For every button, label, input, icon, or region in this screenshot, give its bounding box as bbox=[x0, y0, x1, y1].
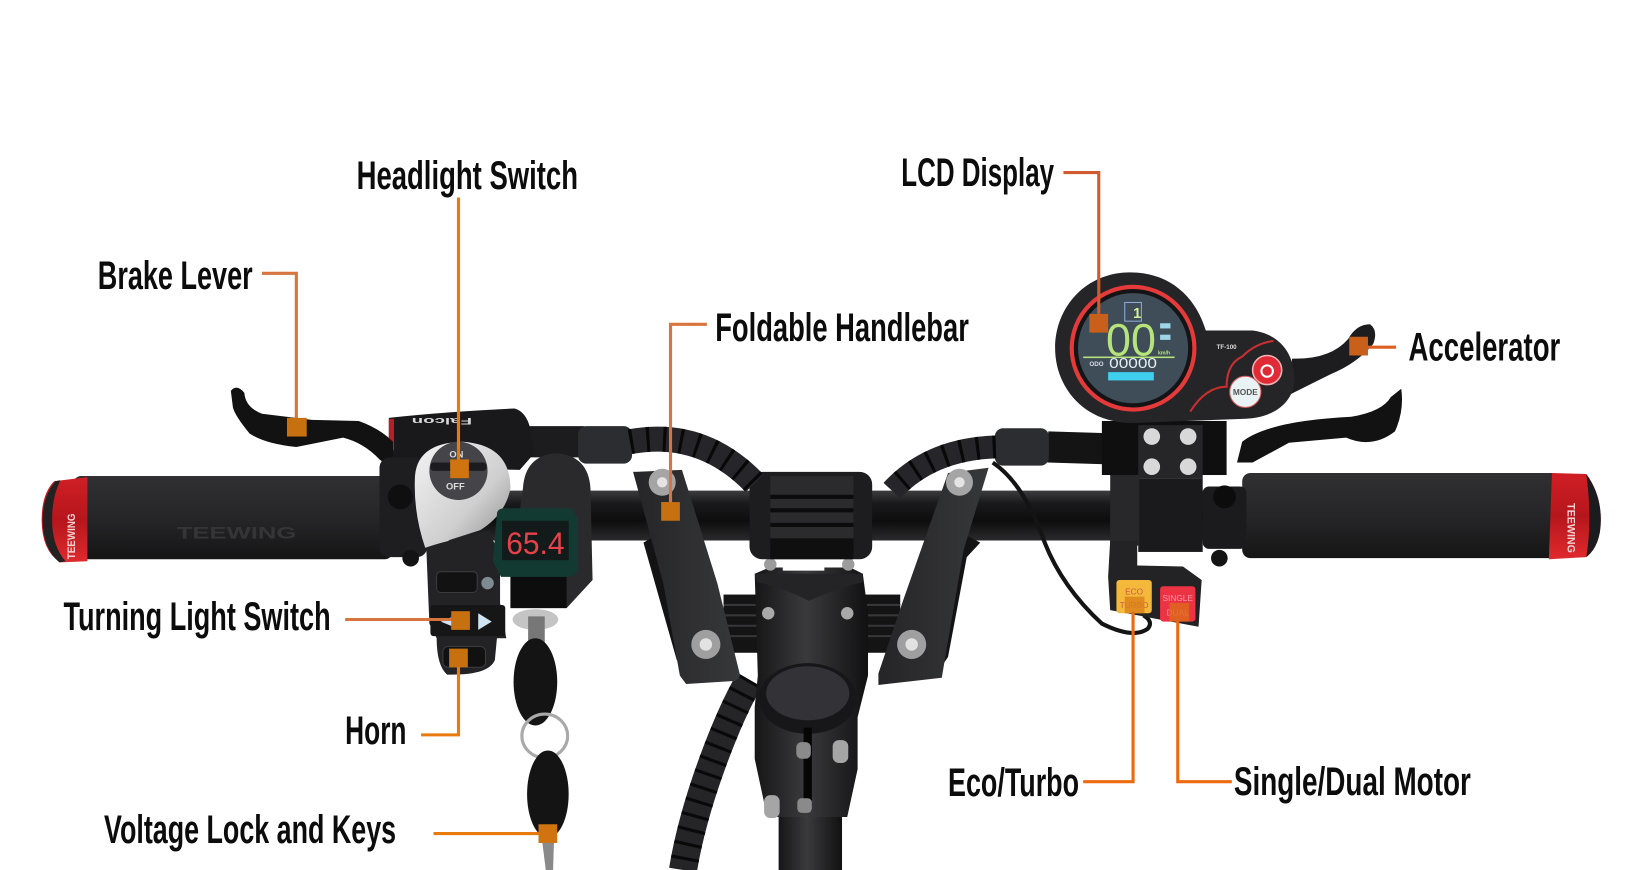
left grip bbox=[42, 476, 393, 562]
callout: Accelerator: Accelerator bbox=[1409, 326, 1560, 370]
LCD readout: 00000 bbox=[1109, 356, 1157, 372]
headlight switch: OFF bbox=[446, 482, 465, 492]
left grip: TEEWING bbox=[177, 523, 296, 542]
right folding bracket bbox=[878, 468, 989, 685]
lock and keys bbox=[513, 609, 569, 870]
LCD readout: ODO bbox=[1089, 361, 1104, 368]
headlight switch bbox=[415, 442, 510, 548]
stem and steering column bbox=[755, 558, 868, 870]
callout: LCD Display: LCD Display bbox=[901, 151, 1054, 195]
LCD display unit bbox=[1055, 272, 1294, 423]
right brake lever bbox=[1237, 389, 1402, 463]
right red bar end bbox=[1549, 473, 1601, 559]
callout: Headlight Switch bbox=[357, 154, 578, 478]
callout: Eco/Turbo: Eco/Turbo bbox=[948, 761, 1079, 805]
callout: Voltage Lock and Keys: Voltage Lock and Keys bbox=[104, 808, 396, 852]
LCD readout: km/h bbox=[1158, 350, 1170, 356]
callout: Foldable Handlebar bbox=[661, 306, 969, 521]
left brake lever bbox=[231, 388, 393, 470]
callout: Foldable Handlebar: Foldable Handlebar bbox=[715, 306, 969, 350]
power button bbox=[1253, 355, 1282, 385]
callout: Horn bbox=[345, 649, 468, 753]
accelerator lever bbox=[1289, 324, 1375, 395]
eco/turbo button: ECO bbox=[1125, 587, 1144, 597]
handlebar tube bbox=[379, 491, 1253, 541]
callout: Eco/Turbo bbox=[948, 597, 1144, 805]
switch block bbox=[426, 530, 506, 675]
eco/turbo button: TURBO bbox=[1120, 600, 1149, 610]
left red bar end bbox=[42, 477, 87, 562]
headlight switch: ON bbox=[449, 449, 464, 459]
LCD readout bbox=[1083, 302, 1175, 380]
wire to mode switches bbox=[993, 463, 1150, 633]
callout: LCD Display bbox=[901, 151, 1108, 333]
single/dual button bbox=[1160, 586, 1195, 622]
LCD readout: 1 bbox=[1133, 306, 1141, 322]
callout: Single/Dual Motor: Single/Dual Motor bbox=[1234, 760, 1471, 804]
single/dual button: SINGLE bbox=[1163, 593, 1193, 603]
throttle clamp with key switch bbox=[510, 453, 593, 608]
callout: Brake Lever bbox=[98, 254, 307, 437]
right grip bbox=[1242, 473, 1601, 559]
callout: Accelerator bbox=[1349, 326, 1560, 370]
right clamp and mount bbox=[1102, 421, 1246, 566]
voltage display: 65.4 bbox=[506, 526, 564, 561]
callout: Horn: Horn bbox=[345, 709, 407, 753]
left folding bracket bbox=[633, 469, 740, 684]
right red bar end: TEEWING bbox=[1565, 503, 1577, 553]
mode button bbox=[1230, 376, 1261, 407]
callout: Single/Dual Motor bbox=[1169, 603, 1471, 804]
voltage display bbox=[493, 508, 578, 577]
mode switch box bbox=[1108, 541, 1202, 627]
coiled brake cable bbox=[683, 680, 750, 870]
left lever clamp bbox=[379, 457, 427, 566]
right ribbed brake cable bbox=[892, 428, 1117, 491]
centre clamp bbox=[750, 472, 872, 559]
turn signal arrows bbox=[441, 613, 492, 630]
eco/turbo button bbox=[1116, 580, 1152, 613]
left brake reservoir bbox=[389, 408, 534, 470]
mode button: MODE bbox=[1233, 387, 1258, 397]
LCD readout: 00 bbox=[1106, 314, 1156, 365]
left brake reservoir: Falcon bbox=[411, 416, 472, 426]
callout: Brake Lever: Brake Lever bbox=[98, 254, 253, 298]
left red bar end: TEEWING bbox=[66, 513, 78, 559]
rear ribbed bar bbox=[724, 595, 900, 653]
single/dual button: DUAL bbox=[1167, 607, 1189, 617]
callout: Headlight Switch: Headlight Switch bbox=[357, 154, 578, 198]
left ribbed brake cable bbox=[525, 426, 755, 483]
callout: Turning Light Switch: Turning Light Switch bbox=[63, 595, 331, 639]
LCD display unit: TF-100 bbox=[1217, 344, 1237, 351]
